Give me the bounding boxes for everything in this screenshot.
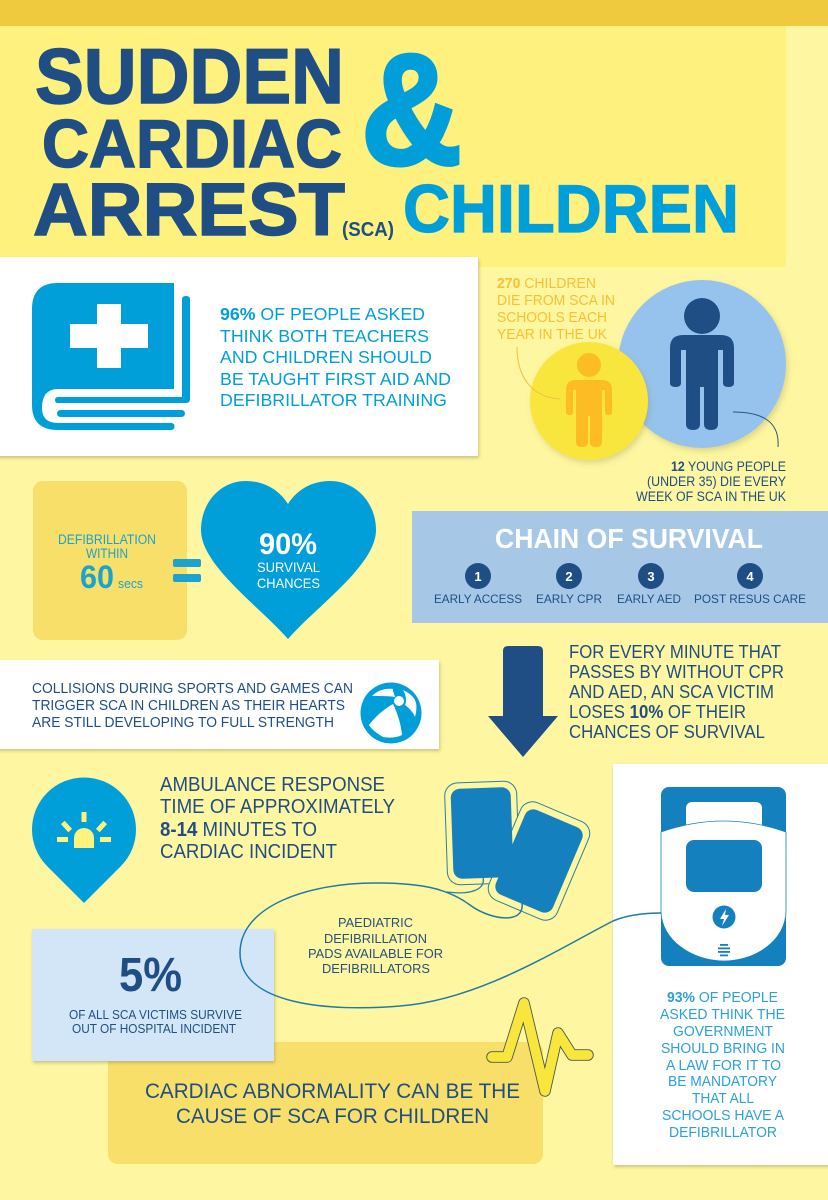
text: 93 percent: A LAW FOR IT TO [666, 1057, 781, 1074]
text: 12 young people [636, 459, 786, 504]
text: every minute: AND AED, AN SCA VICTIM [569, 682, 774, 702]
arrow: down [488, 646, 558, 757]
panel: 5 percent: 5% [119, 949, 182, 1002]
text: ambulance response: TIME OF APPROXIMATELY [160, 795, 395, 818]
panel: 5 percent: OUT OF HOSPITAL INCIDENT [72, 1021, 236, 1036]
heart: 90 percent survival [201, 481, 376, 639]
text: 93 percent: ASKED THINK THE [660, 1006, 785, 1023]
text: 270 children: DIE FROM SCA IN [497, 292, 615, 309]
text: ambulance response: CARDIAC INCIDENT [160, 840, 337, 863]
panel: collisions: ARE STILL DEVELOPING TO FULL STRENGTH [32, 715, 334, 731]
text: paediatric pads [308, 915, 443, 976]
text: 12 young people: WEEK OF SCA IN THE UK [636, 489, 786, 504]
panel: cardiac abnormality: CARDIAC ABNORMALITY CAN BE THE [145, 1080, 520, 1103]
text: every minute [569, 642, 784, 742]
text: every minute: FOR EVERY MINUTE THAT [569, 642, 781, 662]
step 1: 1 [474, 569, 482, 584]
heart: 90 percent survival: CHANCES [257, 575, 320, 591]
step 4: POST RESUS CARE [694, 592, 806, 606]
text: ambulance response: AMBULANCE RESPONSE [160, 773, 385, 796]
text: 96 percent [220, 304, 451, 410]
heart: 90 percent survival: 90% [259, 528, 317, 561]
leader line: young people [733, 412, 778, 447]
top band [0, 0, 828, 26]
text: ambulance response: 8-14 MINUTES TO [160, 818, 317, 841]
step 2: 2 [565, 569, 573, 584]
text: 12 young people: 12 YOUNG PEOPLE [671, 459, 786, 474]
step 3 [617, 563, 681, 606]
text: paediatric pads: PAEDIATRIC [338, 915, 413, 930]
panel: defibrillator [613, 764, 828, 1165]
panel: defibrillation within 60 secs: WITHIN [86, 546, 128, 561]
panel: defibrillation within 60 secs: 60 [80, 559, 114, 595]
icon: defibrillation pads [444, 781, 594, 924]
text: paediatric pads: DEFIBRILLATION [324, 931, 427, 946]
icon: heartbeat line [492, 1003, 588, 1091]
icon: defibrillator [661, 787, 786, 966]
text: 93 percent: SHOULD BRING IN [661, 1040, 785, 1057]
step 3: EARLY AED [617, 592, 681, 606]
title: CARDIAC [42, 106, 342, 182]
panel: cardiac abnormality: CAUSE OF SCA FOR CHILDREN [176, 1105, 489, 1128]
text: 12 young people: (UNDER 35) DIE EVERY [647, 474, 786, 489]
text: 93 percent [660, 989, 785, 1141]
text: 93 percent: GOVERNMENT [673, 1023, 773, 1040]
panel: chain of survival [412, 511, 828, 623]
panel: 5 percent [32, 929, 274, 1061]
icon: equals sign [173, 559, 201, 582]
text: 93 percent: THAT ALL [692, 1090, 754, 1107]
text: 93 percent: 93% OF PEOPLE [667, 989, 778, 1006]
icon: beach ball [360, 682, 422, 744]
text: 96 percent: BE TAUGHT FIRST AID AND [220, 369, 451, 389]
title: CHILDREN [403, 171, 739, 247]
text: 270 children: SCHOOLS EACH [497, 309, 607, 326]
step 1: EARLY ACCESS [434, 592, 522, 606]
text: 93 percent: BE MANDATORY [668, 1073, 777, 1090]
heading: chain of survival: CHAIN OF SURVIVAL [495, 523, 763, 554]
title: (SCA) [342, 219, 394, 241]
panel: cardiac abnormality [108, 1042, 543, 1164]
text: every minute: PASSES BY WITHOUT CPR [569, 662, 784, 682]
text: ambulance response [160, 773, 395, 863]
panel: title background [0, 26, 786, 267]
title [33, 22, 739, 251]
step 4 [694, 563, 806, 606]
panel: defibrillation within 60 secs: DEFIBRILLATION [58, 532, 156, 547]
step 1 [434, 563, 522, 606]
step 2 [536, 563, 602, 606]
text: 93 percent: SCHOOLS HAVE A [662, 1107, 785, 1124]
step 2: EARLY CPR [536, 592, 602, 606]
panel: collisions [0, 660, 439, 749]
text: 270 children: 270 CHILDREN [497, 275, 596, 292]
text: every minute: CHANCES OF SURVIVAL [569, 722, 765, 742]
text: 96 percent: 96% OF PEOPLE ASKED [220, 304, 425, 324]
circle: children [530, 342, 648, 460]
icon: first aid book [32, 283, 190, 430]
text: 93 percent: DEFIBRILLATOR [669, 1124, 777, 1141]
panel: 5 percent: OF ALL SCA VICTIMS SURVIVE [69, 1007, 242, 1022]
icon: large person [670, 298, 734, 430]
panel: defibrillation within 60 secs: secs [118, 576, 143, 591]
panel: defibrillation within 60 secs [33, 481, 187, 640]
title: & [361, 22, 462, 198]
icon: ambulance pin [32, 777, 136, 903]
title: ARREST [33, 168, 345, 251]
text: paediatric pads: PADS AVAILABLE FOR [308, 946, 443, 961]
panel: collisions: COLLISIONS DURING SPORTS AND GAMES CAN [32, 681, 353, 697]
text: 96 percent: DEFIBRILLATOR TRAINING [220, 390, 447, 410]
heart: 90 percent survival: SURVIVAL [257, 559, 320, 575]
icon: small person [566, 353, 612, 447]
cable [240, 883, 661, 1008]
text: 270 children: YEAR IN THE UK [497, 326, 607, 343]
text: 96 percent: AND CHILDREN SHOULD [220, 347, 432, 367]
circle: young people [618, 280, 786, 448]
title: SUDDEN [35, 32, 344, 120]
text: every minute: LOSES 10% OF THEIR [569, 702, 746, 722]
step 4: 4 [746, 569, 754, 584]
text: 96 percent: THINK BOTH TEACHERS [220, 326, 429, 346]
step 3: 3 [647, 569, 655, 584]
leader line: children [517, 347, 560, 399]
chart: people circles [497, 275, 786, 504]
panel: collisions: TRIGGER SCA IN CHILDREN AS THEIR HEARTS [32, 698, 345, 714]
panel: first aid training [0, 257, 478, 456]
text: paediatric pads: DEFIBRILLATORS [322, 961, 430, 976]
text: 270 children [497, 275, 615, 343]
